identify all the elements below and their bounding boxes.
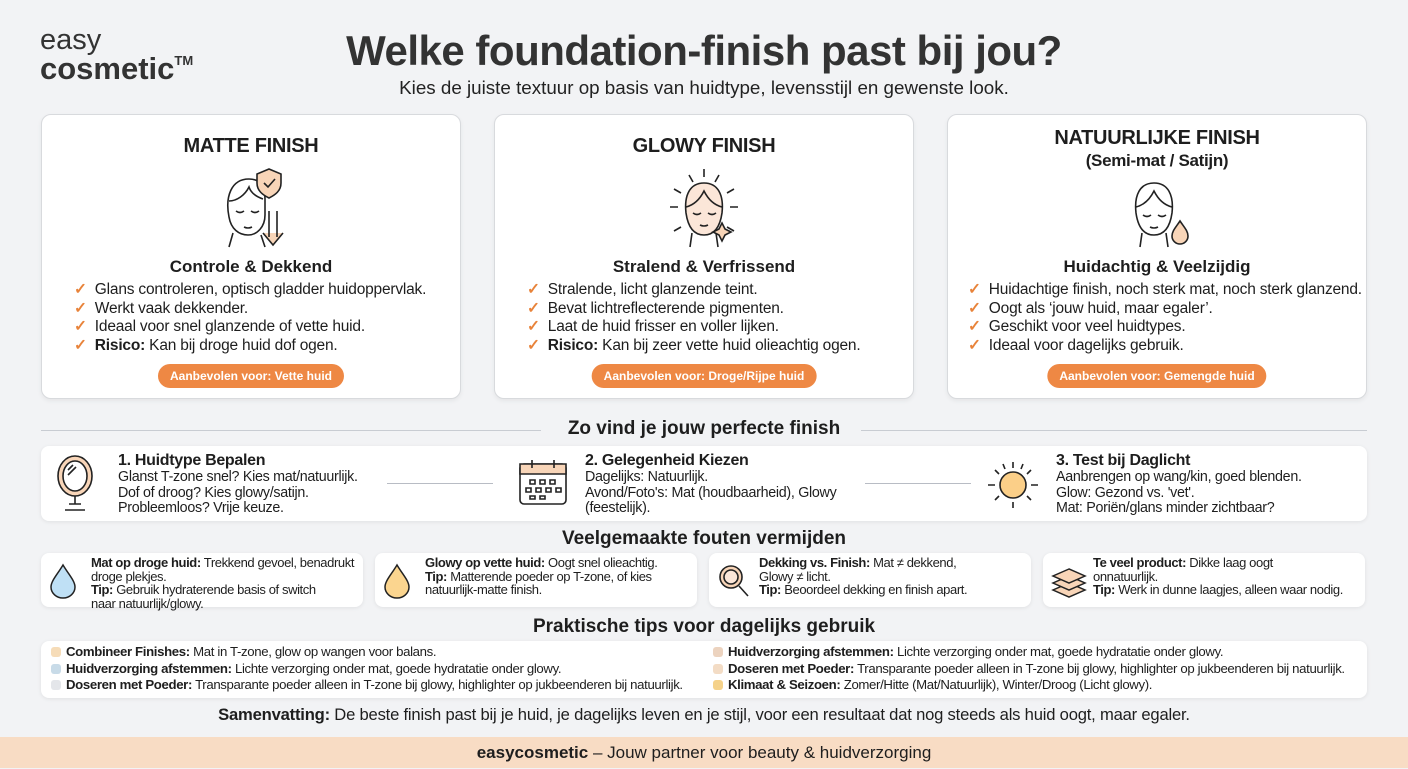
heading: perfecte finish: Zo vind je jouw perfecte finish: [568, 418, 840, 439]
panel: glowy finish: Laat de huid frisser en voller lijken.: [548, 318, 779, 335]
panel: glowy finish: [494, 114, 914, 399]
mistake: dekking vs finish: Tip: Beoordeel dekking en finish apart.: [759, 582, 967, 597]
mistake: mat op droge huid: droge plekjes.: [91, 568, 166, 584]
panel: steps: [41, 446, 1367, 521]
tips left column: [51, 644, 683, 692]
mistake: glowy op vette huid: Tip: Matterende poeder op T-zone, of kies: [425, 568, 652, 584]
mistake: mat op droge huid: Tip: Gebruik hydraterende basis of switch: [91, 582, 316, 597]
step 1: Probleemloos? Vrije keuze.: [118, 500, 284, 516]
recommendation pill: Aanbevolen voor: Gemengde huid: [1059, 369, 1255, 383]
step 1: 1. Huidtype Bepalen: [118, 452, 265, 469]
icon: face with shield: [226, 168, 284, 248]
icon: sun: [988, 462, 1038, 508]
tips right column: Huidverzorging afstemmen: Lichte verzorging onder mat, goede hydratatie onder glowy.: [728, 644, 1223, 659]
panel: natuurlijke finish: Huidachtige finish, noch sterk mat, noch sterk glanzend.: [989, 281, 1362, 298]
panel: matte finish: Glans controleren, optisch gladder huidoppervlak.: [95, 281, 426, 298]
tips right column: Doseren met Poeder: Transparante poeder alleen in T-zone bij glowy, highlighter op jukbeenderen bij natuurlijk.: [728, 660, 1345, 676]
icon: mirror: [57, 455, 93, 511]
recommendation pill: [1047, 364, 1267, 388]
panel: glowy finish: Risico: Kan bij zeer vette huid olieachtig ogen.: [548, 336, 860, 354]
panel: matte finish: [41, 114, 461, 399]
step 1: [118, 452, 358, 516]
step 3: 3. Test bij Daglicht: [1056, 452, 1190, 469]
step 1: Glanst T-zone snel? Kies mat/natuurlijk.: [118, 469, 358, 485]
step 2: Avond/Foto's: Mat (houdbaarheid), Glowy: [585, 484, 836, 500]
tips left column: Doseren met Poeder: Transparante poeder alleen in T-zone bij glowy, highlighter op jukbeenderen bij natuurlijk.: [66, 677, 683, 692]
step 3: Glow: Gezond vs. 'vet'.: [1056, 484, 1194, 500]
panel: natuurlijke finish: Oogt als ‘jouw huid, maar egaler’.: [989, 300, 1213, 316]
mistake: glowy op vette huid: Glowy op vette huid: Oogt snel olieachtig.: [425, 555, 657, 570]
panel: matte finish: Risico: Kan bij droge huid dof ogen.: [95, 336, 338, 354]
heading: praktische tips: Praktische tips voor dagelijks gebruik: [533, 616, 875, 637]
step 3: [1056, 452, 1302, 516]
step 3: Mat: Poriën/glans minder zichtbaar?: [1056, 500, 1274, 516]
panel: glowy finish: GLOWY FINISH: [633, 135, 775, 157]
title: Welke foundation-finish past bij jou?: [346, 27, 1062, 74]
step 1: Dof of droog? Kies glowy/satijn.: [118, 484, 309, 500]
tips right column: Klimaat & Seizoen: Zomer/Hitte (Mat/Natuurlijk), Winter/Droog (Licht glowy).: [728, 677, 1152, 692]
mistake: dekking vs finish: Glowy ≠ licht.: [759, 568, 831, 584]
mistake: te veel product: [1043, 553, 1365, 607]
panel: glowy finish: Stralend & Verfrissend: [613, 257, 795, 276]
icon: calendar: [519, 460, 567, 505]
mistake: dekking vs finish: [709, 553, 1031, 607]
panel: glowy finish: Stralende, licht glanzende teint.: [548, 281, 757, 298]
summary: Samenvatting: De beste finish past bij je huid, je dagelijks leven en je stijl, voor een resultaat dat nog steeds als huid oogt, maar egaler.: [218, 705, 1190, 724]
icon: glowing face: [670, 169, 738, 248]
panel: matte finish: Controle & Dekkend: [170, 257, 332, 276]
recommendation pill: Aanbevolen voor: Vette huid: [170, 369, 332, 383]
panel: matte finish: Werkt vaak dekkender.: [95, 300, 248, 316]
mistake: mat op droge huid: [41, 553, 363, 607]
mistake: glowy op vette huid: natuurlijk-matte finish.: [425, 582, 542, 597]
recommendation pill: Aanbevolen voor: Droge/Rijpe huid: [604, 369, 804, 383]
step 2: 2. Gelegenheid Kiezen: [585, 452, 749, 469]
mistake: te veel product: onnatuurlijk.: [1093, 568, 1158, 584]
panel: matte finish: MATTE FINISH: [184, 135, 318, 157]
mistake: mat op droge huid: naar natuurlijk/glowy.: [91, 596, 203, 610]
panel: natuurlijke finish: Huidachtig & Veelzijdig: [1063, 257, 1251, 276]
panel: natuurlijke finish: NATUURLIJKE FINISH: [1054, 127, 1260, 149]
mistake: mat op droge huid: Mat op droge huid: Trekkend gevoel, benadrukt: [91, 555, 354, 570]
panel: natuurlijke finish: [947, 114, 1367, 399]
panel: natuurlijke finish: Geschikt voor veel huidtypes.: [989, 318, 1185, 335]
recommendation pill: [592, 364, 816, 388]
tips right column: [713, 644, 1345, 692]
panel: tips: [41, 641, 1367, 698]
panel: natuurlijke finish: (Semi-mat / Satijn): [1086, 151, 1228, 170]
mistake: te veel product: Te veel product: Dikke laag oogt: [1093, 555, 1273, 570]
mistake: te veel product: Tip: Werk in dunne laagjes, alleen waar nodig.: [1093, 582, 1343, 597]
footer bar: [0, 737, 1408, 768]
step 3: Aanbrengen op wang/kin, goed blenden.: [1056, 469, 1302, 485]
icon: face with drop: [1134, 182, 1189, 248]
step 2: [585, 452, 837, 516]
logo: cosmeticTM: [40, 51, 193, 86]
recommendation pill: [158, 364, 344, 388]
heading: fouten: Veelgemaakte fouten vermijden: [562, 528, 846, 549]
tips left column: Combineer Finishes: Mat in T-zone, glow op wangen voor balans.: [66, 644, 436, 659]
panel: natuurlijke finish: Ideaal voor dagelijks gebruik.: [989, 336, 1184, 354]
step 2: Dagelijks: Natuurlijk.: [585, 469, 708, 485]
step 2: (feestelijk).: [585, 500, 650, 516]
tips left column: Huidverzorging afstemmen: Lichte verzorging onder mat, goede hydratatie onder glowy.: [66, 660, 561, 676]
mistake: dekking vs finish: Dekking vs. Finish: Mat ≠ dekkend,: [759, 555, 956, 570]
panel: matte finish: Ideaal voor snel glanzende of vette huid.: [95, 318, 365, 335]
logo: easy: [40, 24, 101, 56]
panel: glowy finish: Bevat lichtreflecterende pigmenten.: [548, 300, 784, 316]
logo: [40, 24, 193, 86]
subtitle: Kies de juiste textuur op basis van huidtype, levensstijl en gewenste look.: [399, 77, 1009, 98]
mistake: glowy op vette huid: [375, 553, 697, 607]
footer bar: easycosmetic – Jouw partner voor beauty & huidverzorging: [477, 743, 931, 762]
